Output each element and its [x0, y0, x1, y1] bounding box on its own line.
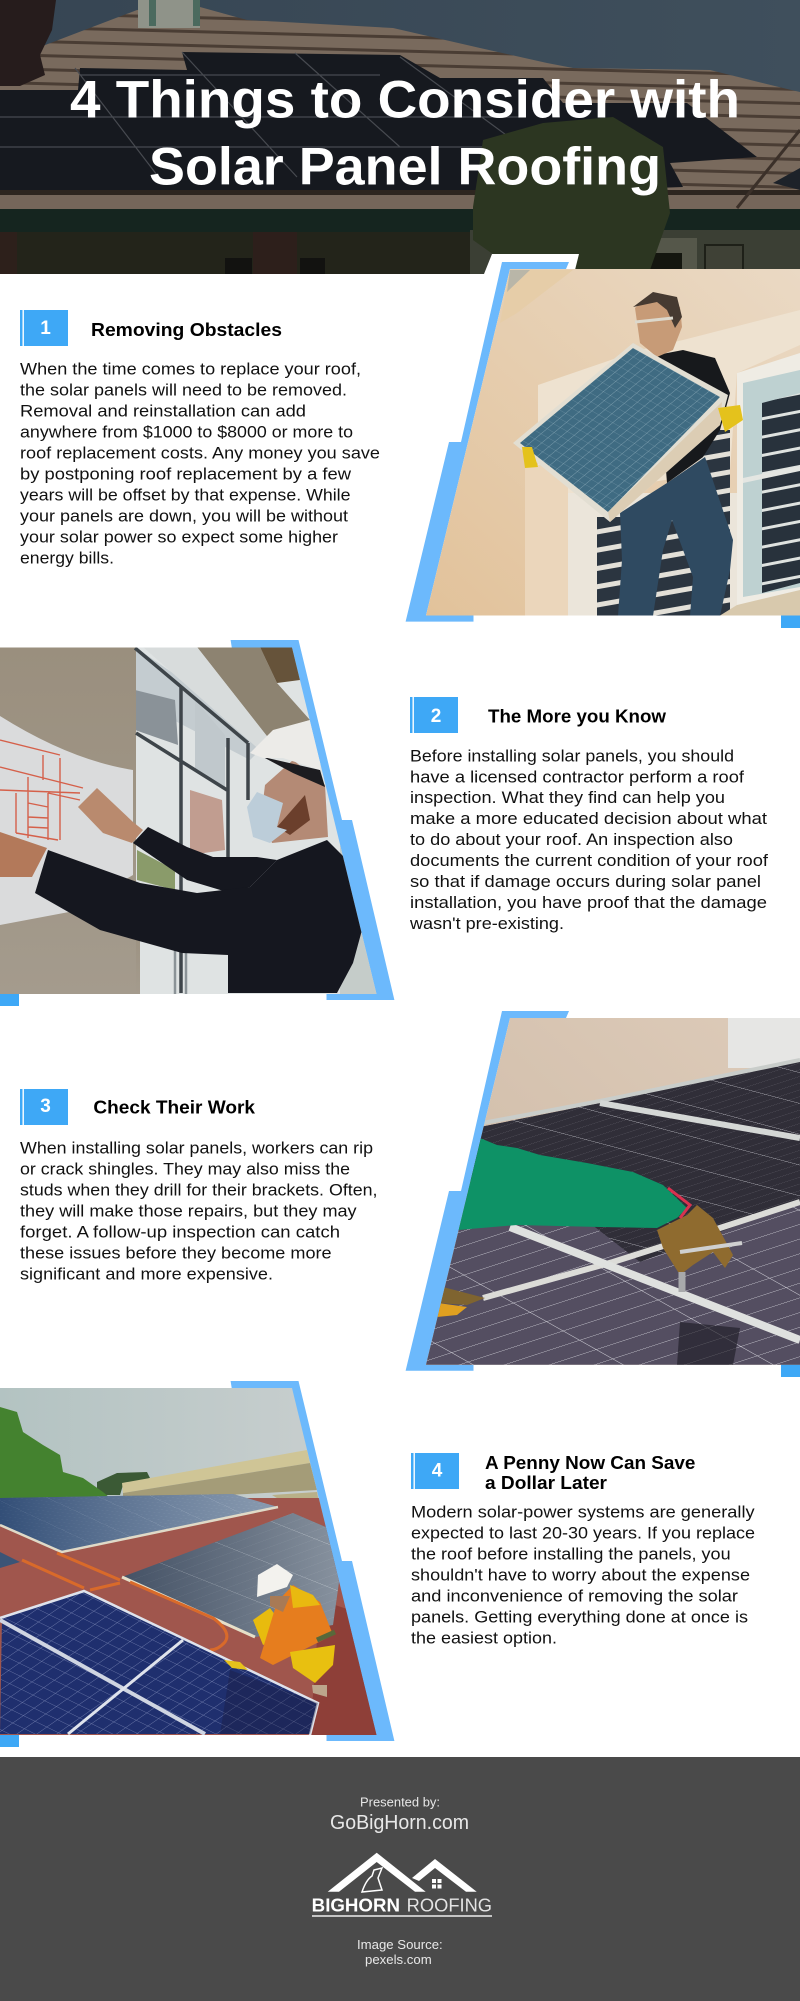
step 2 heading: The More you Know	[488, 706, 667, 727]
step 1 body text: roof replacement costs. Any money you save	[20, 444, 380, 462]
step 2 body text: have a licensed contractor perform a roof	[410, 768, 744, 786]
step 2 body text: wasn't pre-existing.	[409, 915, 564, 933]
step 4 number badge: 4	[432, 1461, 443, 1482]
step 2 body text: documents the current condition of your roof	[410, 852, 768, 870]
panel: section 1 removing obstacles	[20, 262, 800, 628]
step 3 body text: they will make those repairs, but they may	[20, 1202, 357, 1220]
photo: worker in hard hat with blueprint	[0, 647, 380, 995]
step 4 body text: Modern solar-power systems are generally	[411, 1504, 755, 1522]
step 4 body text	[411, 1504, 755, 1647]
step 1 body text: the solar panels will need to be removed.	[20, 382, 347, 400]
step 1 body text: your panels are down, you will be without	[20, 507, 348, 525]
step 2 body text	[409, 747, 768, 933]
step 2 body text: make a more educated decision about what	[410, 810, 767, 828]
step 1 body text: years will be offset by that expense. While	[20, 486, 350, 504]
step 3 body text: forget. A follow-up inspection can catch	[20, 1223, 340, 1241]
step 4 number badge	[411, 1453, 459, 1489]
presented by label: Presented by:	[360, 1795, 440, 1810]
image source credit: pexels.com	[365, 1953, 432, 1967]
panel: section 4 a penny now	[0, 1381, 755, 1747]
photo: man carrying a solar panel	[420, 269, 800, 616]
step 1 body text: your solar power so expect some higher	[20, 528, 339, 546]
photo frame accent 4	[0, 1381, 394, 1747]
panel: section 2 the more you know	[0, 640, 768, 1006]
step 1 body text: by postponing roof replacement by a few	[20, 466, 351, 484]
step 4 heading	[485, 1452, 695, 1493]
panel: footer	[0, 1757, 800, 2001]
title	[70, 70, 740, 196]
title: Solar Panel Roofing	[149, 138, 661, 196]
photo frame accent 2	[0, 640, 394, 1006]
step 4 body text: panels. Getting everything done at once is	[411, 1608, 748, 1626]
step 1 body text: anywhere from $1000 to $8000 or more to	[20, 424, 353, 442]
step 1 body text: When the time comes to replace your roof,	[20, 361, 361, 379]
step 3 number badge	[20, 1089, 68, 1125]
step 3 body text: studs when they drill for their brackets. Often,	[20, 1181, 378, 1199]
step 4 heading: A Penny Now Can Save	[485, 1452, 695, 1473]
image source credit	[357, 1938, 443, 1967]
title: 4 Things to Consider with	[70, 70, 740, 130]
logo: Bighorn Roofing: BIGHORN	[312, 1896, 400, 1916]
step 3 body text	[20, 1139, 378, 1283]
step 1 heading: Removing Obstacles	[91, 319, 282, 340]
hero photo: house roof with solar panels	[0, 0, 800, 274]
step 1 number badge	[20, 310, 68, 346]
logo: Bighorn Roofing: ROOFING	[407, 1896, 492, 1916]
step 2 body text: installation, you have proof that the damage	[410, 894, 767, 912]
website name: GoBigHorn.com	[330, 1812, 469, 1834]
step 2 body text: inspection. What they find can help you	[410, 789, 725, 807]
step 3 heading: Check Their Work	[93, 1096, 256, 1117]
step 4 body text: the roof before installing the panels, you	[411, 1546, 731, 1564]
step 1 body text: Removal and reinstallation can add	[20, 403, 306, 421]
step 3 body text: or crack shingles. They may also miss the	[20, 1160, 350, 1178]
photo: gloved hand fastening solar panels	[420, 1018, 800, 1365]
step 4 body text: shouldn't have to worry about the expense	[411, 1566, 750, 1584]
step 2 body text: so that if damage occurs during solar panel	[410, 873, 761, 891]
step 4 body text: and inconvenience of removing the solar	[411, 1588, 739, 1606]
panel: section 3 check their work	[20, 1011, 800, 1377]
step 3 number badge: 3	[40, 1096, 51, 1117]
step 4 body text: expected to last 20-30 years. If you replace	[411, 1525, 755, 1543]
step 3 body text: significant and more expensive.	[20, 1265, 273, 1283]
step 1 number badge: 1	[40, 318, 51, 339]
photo frame accent 1	[406, 262, 800, 628]
step 3 body text: these issues before they become more	[20, 1244, 332, 1262]
logo: Bighorn Roofing	[312, 1853, 492, 1917]
photo frame accent 3	[406, 1011, 800, 1377]
step 2 body text: to do about your roof. An inspection also	[410, 831, 733, 849]
step 1 body text: energy bills.	[20, 549, 114, 567]
photo: worker installing rooftop panels	[0, 1388, 380, 1735]
step 2 body text: Before installing solar panels, you should	[410, 747, 734, 765]
step 3 body text: When installing solar panels, workers can rip	[20, 1139, 373, 1157]
step 2 number badge: 2	[431, 706, 441, 727]
step 2 number badge	[410, 697, 458, 733]
step 1 body text	[20, 361, 380, 567]
image source credit: Image Source:	[357, 1938, 443, 1952]
white frame behind photo 1	[484, 254, 579, 274]
step 4 body text: the easiest option.	[411, 1629, 557, 1647]
step 4 heading: a Dollar Later	[485, 1472, 607, 1493]
